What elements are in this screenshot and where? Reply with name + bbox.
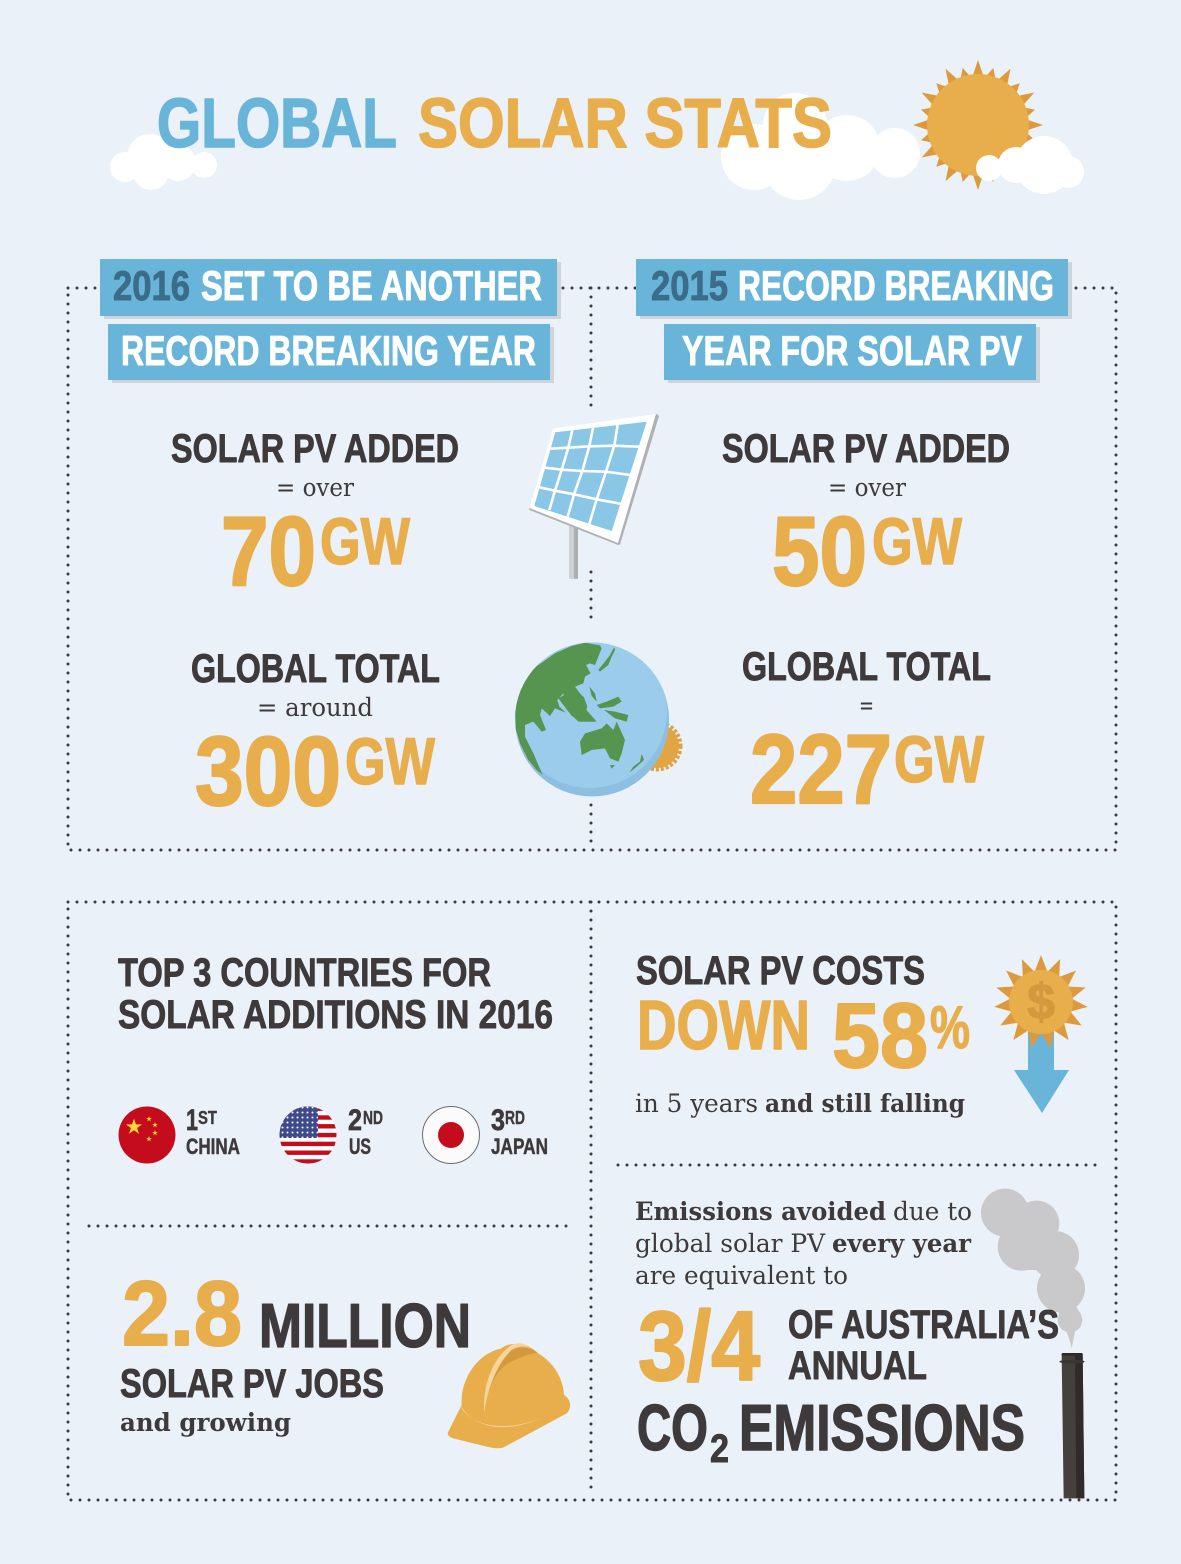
label: 1st China <box>186 1104 240 1159</box>
banner: 2016 heading: 2016 <box>113 262 190 309</box>
flag row: US <box>279 1104 383 1164</box>
stat: 2015 solar PV added <box>722 427 1010 606</box>
illustration: clouds and sun <box>110 60 1084 200</box>
stat: emissions avoided: EMISSIONS <box>739 1391 1025 1464</box>
banner: 2016 heading <box>100 259 561 383</box>
label: 1st China: CHINA <box>186 1134 240 1159</box>
icon: US flag <box>279 1106 337 1164</box>
stat: 2016 solar PV added <box>171 427 459 606</box>
stat: 2016 global total: GW <box>345 724 436 798</box>
stat: 2016 global total: = around <box>257 693 373 722</box>
icon: right cloud <box>976 136 1084 194</box>
stat: emissions avoided: are equivalent to <box>635 1261 848 1290</box>
stat: solar PV jobs: 2.8 <box>122 1263 242 1365</box>
title <box>157 84 832 162</box>
stat: solar PV jobs: SOLAR PV JOBS <box>120 1362 384 1406</box>
icon: middle cloud <box>721 93 920 200</box>
stat: solar PV costs: DOWN <box>637 986 810 1064</box>
stat: solar PV jobs: MILLION <box>259 1292 471 1361</box>
title: GLOBAL <box>157 84 397 162</box>
stat: 2015 global total <box>742 645 991 824</box>
icon: Japan flag <box>422 1106 480 1164</box>
stat: emissions avoided: every year <box>832 1229 972 1258</box>
icon: hard hat <box>448 1343 570 1448</box>
arrow: costs falling <box>1014 1030 1069 1113</box>
stat: solar PV costs: 58 <box>832 985 928 1087</box>
label: 2nd US: US <box>349 1134 371 1159</box>
stat: emissions avoided: global solar PV <box>635 1229 826 1258</box>
stat: solar PV jobs: and growing <box>120 1408 291 1437</box>
icon: China flag <box>118 1106 176 1164</box>
stat: emissions avoided: 2 <box>710 1427 729 1471</box>
banner: 2016 heading: RECORD BREAKING YEAR <box>121 327 536 374</box>
icon: solar panel <box>529 414 659 579</box>
stat: 2016 solar PV added: 70 <box>221 496 316 606</box>
banner: 2015 heading <box>636 259 1072 383</box>
flag row: Japan <box>422 1104 548 1164</box>
label: 1st China: 1 <box>186 1104 198 1137</box>
stat: solar PV costs: SOLAR PV COSTS <box>636 949 925 993</box>
stat: emissions avoided: OF AUSTRALIA’S <box>788 1303 1059 1347</box>
stat: 2015 solar PV added: 50 <box>772 496 867 606</box>
stat: solar PV costs: and still falling <box>765 1089 965 1118</box>
stat: 2015 solar PV added: = over <box>828 473 906 502</box>
icon: sun <box>913 60 1043 190</box>
banner: 2015 heading: RECORD BREAKING <box>738 262 1054 309</box>
stat: emissions avoided: 3/4 <box>638 1291 760 1401</box>
panel: top dotted frame <box>68 288 1116 850</box>
stat: 2016 global total <box>191 647 440 826</box>
stat: 2015 global total: GLOBAL TOTAL <box>742 645 991 689</box>
label: 1st China: ST <box>198 1108 217 1128</box>
stat: 2015 global total: GW <box>894 722 985 796</box>
label: 2nd US <box>348 1104 383 1159</box>
label: 3rd Japan: 3 <box>491 1104 505 1137</box>
stat: 2016 global total: 300 <box>195 716 341 826</box>
stat: solar PV costs <box>635 949 970 1118</box>
stat: solar PV jobs <box>120 1263 471 1437</box>
stat: emissions avoided: CO <box>637 1391 708 1464</box>
stat: 2015 solar PV added: SOLAR PV ADDED <box>722 427 1010 471</box>
stat: 2016 solar PV added: = over <box>276 473 354 502</box>
stat: 2015 global total: 227 <box>750 714 892 824</box>
banner: 2016 heading: SET TO BE ANOTHER <box>201 262 542 309</box>
stat: emissions avoided: ANNUAL <box>788 1344 927 1388</box>
icon: chimney with smoke <box>981 1189 1085 1498</box>
stat: 2015 solar PV added: GW <box>872 504 963 578</box>
icon: globe with sun behind <box>513 634 680 796</box>
stat: emissions avoided: due to <box>893 1197 972 1226</box>
stat: 2016 solar PV added: GW <box>320 504 411 578</box>
icon: dollar sun <box>994 955 1088 1049</box>
label: 2nd US: 2 <box>348 1104 362 1137</box>
title: SOLAR STATS <box>418 84 832 162</box>
banner: 2015 heading: YEAR FOR SOLAR PV <box>682 327 1022 374</box>
stat: solar PV costs: % <box>930 994 970 1061</box>
heading: top 3 countries: SOLAR ADDITIONS IN 2016 <box>118 993 553 1037</box>
stat: solar PV costs: in 5 years <box>635 1089 758 1118</box>
banner: 2015 heading: 2015 <box>651 262 728 309</box>
icon: left cloud <box>110 134 217 190</box>
stat: emissions avoided <box>635 1197 1059 1471</box>
heading: top 3 countries: TOP 3 COUNTRIES FOR <box>118 951 491 995</box>
panel: bottom dotted frame <box>68 902 1116 1500</box>
icon: dollar sun with down arrow <box>994 955 1088 1113</box>
heading: top 3 countries <box>118 951 553 1037</box>
label: 3rd Japan: RD <box>505 1108 525 1128</box>
stat: 2016 global total: GLOBAL TOTAL <box>191 647 440 691</box>
label: 3rd Japan <box>491 1104 548 1159</box>
flag row: China <box>118 1104 240 1164</box>
icon: dollar sun: $ <box>1027 974 1055 1030</box>
stat: 2016 solar PV added: SOLAR PV ADDED <box>171 427 459 471</box>
label: 2nd US: ND <box>363 1108 383 1128</box>
label: 3rd Japan: JAPAN <box>491 1134 548 1159</box>
stat: 2015 global total: = <box>859 691 874 720</box>
stat: emissions avoided: Emissions avoided <box>635 1197 886 1226</box>
